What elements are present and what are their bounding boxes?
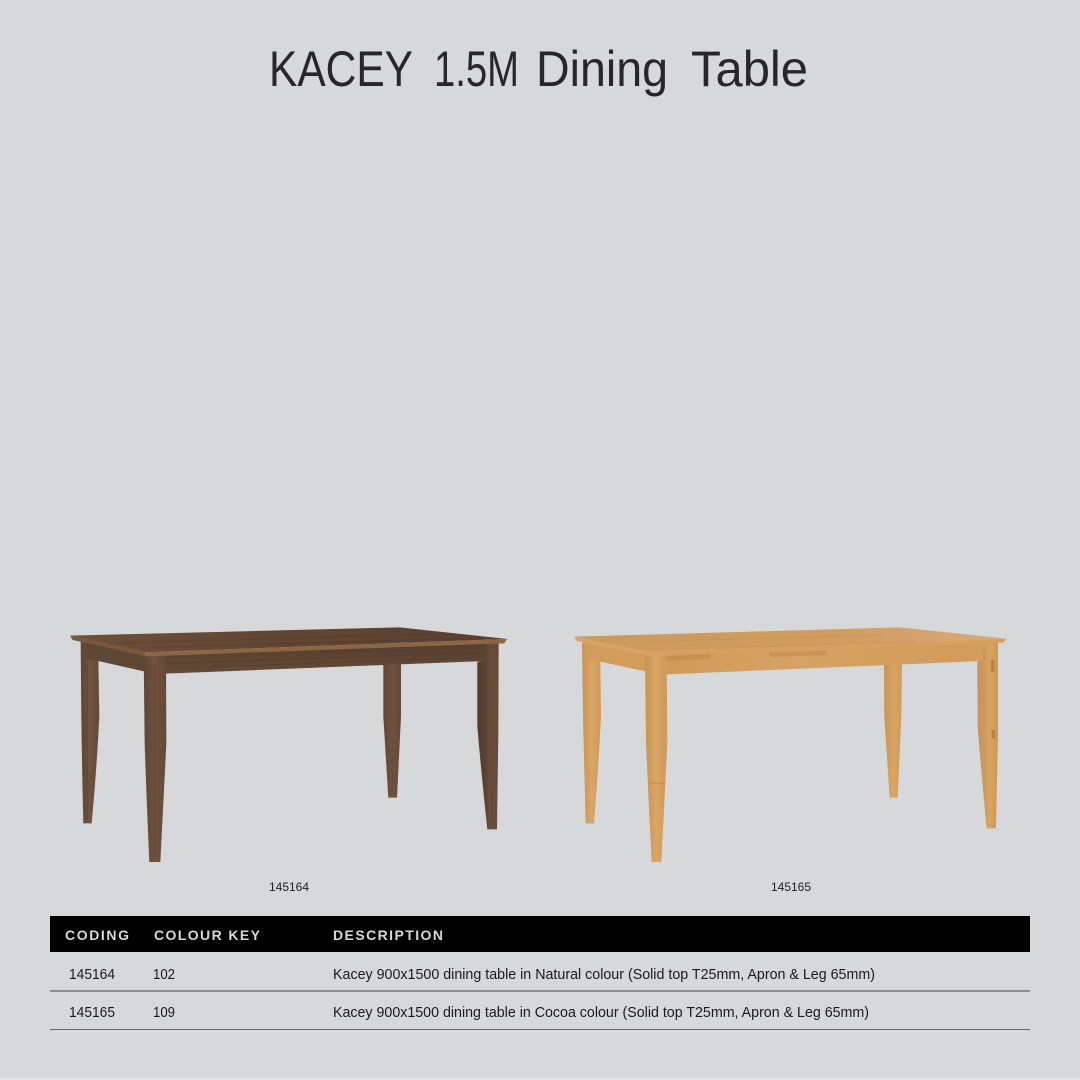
title: Dining (536, 41, 668, 97)
header: description: DESCRIPTION (333, 927, 443, 943)
header: coding: CODING (65, 927, 129, 943)
table row: 145165: 145165 (69, 1005, 115, 1021)
caption: 145165: 145165 (771, 880, 811, 894)
table header (50, 916, 1030, 952)
table row: 145164 (50, 967, 1030, 992)
caption: 145164: 145164 (269, 880, 309, 894)
title: Table (691, 41, 808, 97)
table row: 145165: 109 (153, 1005, 175, 1021)
table row: 145165: Kacey 900x1500 dining table in Cocoa colour (Solid top T25mm, Apron & Leg 65mm) (333, 1005, 869, 1021)
table row: 145164: Kacey 900x1500 dining table in Natural colour (Solid top T25mm, Apron & Leg 65mm) (333, 967, 875, 983)
title (269, 41, 808, 97)
title: KACEY (269, 41, 413, 97)
table row: 145165 (50, 1005, 1030, 1030)
product image: cocoa table 145164 (70, 627, 507, 862)
header: colour key: COLOUR KEY (154, 927, 261, 943)
title: 1.5M (434, 41, 519, 97)
table row: 145164: 145164 (69, 967, 115, 983)
product image: natural table 145165 (574, 627, 1007, 862)
table row: 145164: 102 (153, 967, 175, 983)
